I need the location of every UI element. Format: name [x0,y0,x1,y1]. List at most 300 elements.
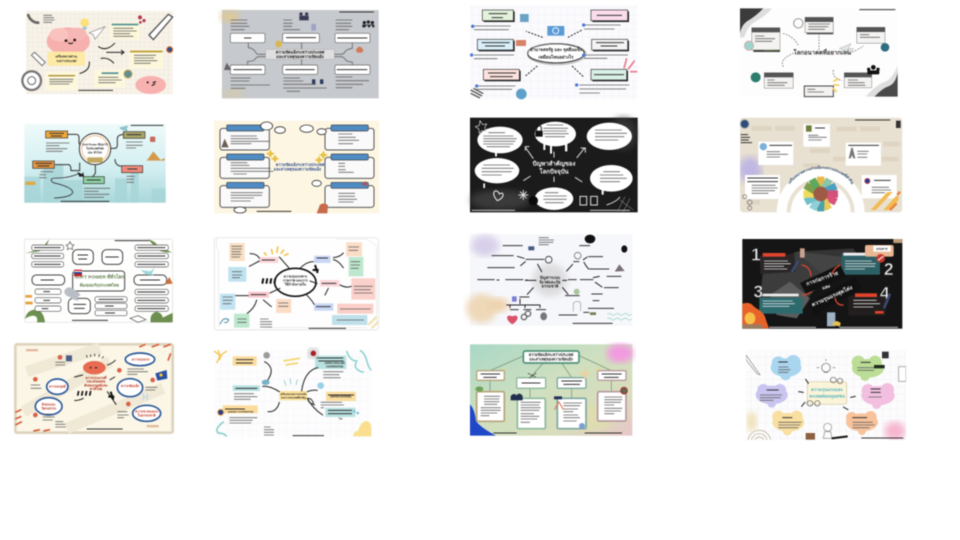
icon: pink wash [884,422,906,440]
icon: group of people [362,20,374,27]
icon: dark figure [554,396,562,399]
box text [231,134,359,202]
icon: paper plane [89,27,105,39]
icon: chalk heart [494,191,503,201]
icon: paper planes [839,44,853,52]
icon: shield [806,125,812,132]
grunge texture [760,248,867,318]
description text [474,25,629,93]
corner stripes [368,317,378,328]
tag labels: JAPAN-THAILAND [324,362,345,365]
content text [481,396,622,422]
icon: tall stripes [503,367,600,372]
tag labels [228,362,351,420]
heading label: ระหว่างประเทศ [56,58,76,63]
diagonal title bands: ความรุนแรงสุดโต่ง [810,283,854,308]
icon: UN flag [547,26,564,36]
tag boxes [477,10,629,81]
icon: splats [585,235,627,253]
icon: globe [516,89,527,99]
icon: chain [521,311,531,320]
numerals: 3 [754,282,764,302]
centre circle title [79,133,111,165]
icon: torn paper [800,248,805,258]
panel text [763,261,880,307]
title: โลกอนาคตที่อยากเห็น [793,48,852,57]
sparkles [266,149,328,164]
connectors [248,43,352,65]
centre circle title: ในประเทศไทย [86,146,104,151]
footer [861,436,903,439]
centre title [807,382,847,404]
icon: gears [275,41,282,47]
centre title [274,161,325,172]
purple wash [739,157,761,183]
icon: film [882,352,889,358]
side text [741,135,752,143]
cloud labels [41,357,159,418]
note box bottom centre [94,70,125,87]
icon: fireworks figures [317,203,328,213]
header note [131,124,163,127]
icon: tank [874,365,885,368]
handwriting [832,436,848,438]
cloud labels: ความมนุษย์ [49,385,66,390]
body text [229,372,344,435]
curved arrows [263,362,323,415]
bullets [470,23,585,88]
icon: red dots [138,15,146,24]
beige corner [893,239,902,243]
clouds [234,122,326,213]
icon: burst lines [264,246,289,256]
central title: และสาเหตุของความขัดแย้ง [276,53,324,60]
dashed path with plane [51,173,79,198]
beige swirls [23,348,163,428]
centre ellipse title: กายภาพ และการ [283,279,308,283]
icon: chalk star [475,121,487,133]
icon: sun burst [624,58,637,72]
icon: bomb people [511,394,523,400]
tag labels: COOPERATION [326,365,344,368]
centre title: สังคมมนุษย์และ [84,382,108,388]
red bullets [33,355,155,417]
side icons [743,195,752,210]
bullet lists [231,20,369,91]
icon: stop sign [865,245,894,263]
blue headers [227,125,368,188]
hierarchy lines [490,356,611,398]
diagonal title bands: การก่อการร้าย [805,269,839,288]
panel text [755,24,880,92]
icon: building [827,312,841,326]
orange stripes [871,192,899,210]
title [533,160,576,176]
icon: burst [518,190,528,200]
icon: signpost [25,182,35,185]
tag labels: โลก [338,416,343,420]
icon: fingerprint [540,312,547,320]
icon: cup [262,380,270,385]
icon: device [528,246,534,250]
footer [493,431,622,434]
cloud text [482,125,627,203]
centre title: เครื่องหมายความร่วมมือ [280,392,307,396]
footer [573,322,613,325]
buildings [24,165,166,203]
icon: light bulb [80,18,89,30]
centre circle title: Soft Power คืออะไร [82,142,108,147]
icon: network [794,19,803,28]
wave pattern [607,313,632,320]
content boxes [477,392,626,429]
icon: pencil [746,355,760,375]
chalk arrows and doodles [523,147,585,182]
numerals: 1 [751,244,761,264]
arch [776,168,865,212]
card 14: yellow highlight mind map [214,348,372,437]
centre title: ความรุนแรงและ [811,387,844,393]
icon: UN [317,382,324,389]
icon: concentric arcs [747,429,772,440]
top-left corner shape [740,8,763,34]
card 5: soft power on sky city [24,124,166,203]
tag labels [248,256,339,311]
card 6: conflict cards on cream [214,121,379,213]
central title: ปัญหาระบบ [540,274,561,281]
arrows [75,360,116,404]
icon: tall H [143,393,147,401]
yellow tags [223,356,356,413]
red stripes [15,344,171,431]
card 8: cooperation on brick wall [740,117,902,213]
icon: atom [545,256,552,263]
footer text [472,209,630,212]
cloud labels: ในธรรมชาติ [138,413,156,418]
icon: red pin [362,181,367,186]
icon: tank [590,312,596,315]
central title: นิเวศและภัย [539,279,561,284]
centre ellipse title: เหมือนไหนอย่างไร [539,54,574,60]
red labels [763,253,884,314]
centre title: ละเลยต่อมนุษยชน [809,393,846,399]
icon: plant [823,423,832,438]
icon: stop sign: STOP IT [876,247,888,251]
arrows [799,379,855,410]
centre title: ความขัดแย้งระหว่างประเทศ [276,161,325,167]
reference text [260,319,272,327]
icon: snake [220,319,229,324]
tag labels [35,133,141,180]
icon: rosette badge [22,71,41,90]
tag labels [482,14,624,77]
arrows [236,253,351,313]
node labels [233,38,367,70]
icon: padlock [535,126,543,137]
red arrows [802,265,844,305]
diagonal title bands: และ [821,283,831,291]
icon: meeting people [312,79,323,84]
centre ellipse title: ใช้กำลังภายใน [285,282,307,287]
cloud labels: สังคมและ [42,402,56,407]
speech bubbles [807,377,843,406]
header note [339,10,374,13]
icon: yellow splat [353,421,371,436]
icon: ASEAN seal [218,409,224,415]
icon: book badge [66,355,72,361]
photo panels [759,253,886,316]
cloud labels: ความขาดแคลน [135,410,159,414]
icon: earth [751,72,761,82]
icon: dots [353,410,359,414]
brick pattern [747,126,900,205]
body text [39,142,143,197]
centre title: ชาติไทย [90,386,102,391]
title: โลกปัจจุบัน [538,168,570,176]
note box top [110,23,140,39]
card 15: green watercolor hierarchy [470,344,633,436]
icon: globe seal [124,70,132,78]
centre photo [813,187,828,201]
panels [752,17,885,97]
cloud text [767,362,881,418]
icon: temple [165,277,173,284]
dashed arrows [782,33,863,81]
note box bottom left [46,72,77,90]
icon: figure [313,265,319,273]
icon: temple [147,151,165,161]
icon: temple [221,139,229,147]
card 3: UN mind map [470,5,638,99]
box text [747,128,891,182]
icon: notebook [899,367,906,381]
centre title: และสาเหตุของความขัดแย้ง [274,165,321,172]
heading label: เครื่องหมายต่างๆ [55,53,78,59]
icon: chalk hands [580,196,620,205]
icon: UN logo circle [744,41,754,50]
icon: plane [77,172,84,177]
card 12: dark collage terrorism [742,239,902,329]
icon: dollar signs [78,391,91,396]
icon: star [66,242,74,250]
footer [769,326,898,329]
icon: flower [579,423,585,429]
footer text [78,89,113,92]
teal tags [233,356,355,417]
tag boxes [33,131,145,184]
title box: และสาเหตุของความขัดแย้ง [529,356,573,362]
icon: light bulb [817,359,835,372]
white splat clouds [475,122,633,210]
node labels [477,246,621,315]
icon: figure [150,137,155,142]
pill labels [34,248,165,313]
cloud labels: ความขัดแย้ง [121,383,140,388]
card 1: brain infographic on cream grid [22,11,173,94]
central title: ความขัดแย้งระหว่างประเทศ [276,49,325,55]
top list [539,238,554,245]
title box: SOFT POWER ที่ทั่วโลก [75,273,124,279]
dashed arrows [525,30,583,77]
pink rays and loops [284,378,297,386]
rounded nodes [32,250,167,314]
tag labels: (UNITED NATIONS) [330,395,351,398]
icon: radar [574,252,581,259]
title box [73,271,125,291]
card 4: world dark panels [740,8,898,97]
icon: seal top left [740,120,749,128]
card 2: grey mind map [220,10,379,98]
icon: pink brain mascot [47,27,90,55]
icon: photo [806,433,815,440]
red cloud mascot [83,361,106,374]
icon: seal [167,47,173,53]
icon: thai flag [74,270,82,276]
category labels [481,374,622,384]
icon: tech globe [881,43,889,52]
centre circle title: และ ทั่วโลก [88,150,102,155]
icon: soldier [108,392,114,400]
icon: plants [574,289,580,295]
centre title: ความรุนแรงที่ [86,375,107,381]
footer [72,319,108,322]
title box: ความขัดแย้งระหว่างประเทศ [529,351,574,357]
icon: people [299,12,309,20]
rays [86,354,104,358]
central title: ธรรมชาติ [542,284,559,289]
icon: flag person [896,121,901,128]
icon: blue corner [470,404,496,436]
icon: explosion [742,303,769,328]
numerals [751,244,893,303]
icon: UN [760,143,767,150]
icon: bird [119,125,129,132]
footer [309,327,346,330]
centre title: ระหว่างประเทศที่สำคัญ [281,395,307,401]
icon: sand speckle [746,412,757,432]
icon: orange legs [555,402,563,410]
icon: temple [224,63,231,70]
card 11: pale network diagram [466,234,632,326]
icon: soldier dot [621,387,627,394]
small text [31,362,157,427]
dollar signs [262,278,275,284]
pastel cloud bubbles [756,355,895,435]
bottom-right corner shape [874,72,898,97]
icon: heart [507,316,518,324]
corner labels [26,349,159,427]
centre title: และส่งผลต่อ [87,380,105,384]
note text [223,246,373,322]
icon: ASEAN seal [865,178,870,184]
centre ellipse title: อำนาจสหรัฐ และ จุดยืนแข็ง [530,45,582,53]
white info boxes [745,124,897,199]
title: ปัญหาสำคัญของ [533,160,576,168]
icon: sparkle [578,366,592,381]
icon: splat [529,196,538,205]
SDG coloured wheel [803,177,838,211]
icon: yellow rays [833,79,839,92]
circuit border lines [217,238,377,328]
footer [87,427,123,430]
centre ellipse title: ความรุนแรงทาง [284,275,307,280]
icon: thai sign [25,295,33,304]
title box [523,351,579,363]
cloud labels: วัฒนธรรม [41,405,56,410]
icon: bird [141,267,155,275]
icon: flag [155,370,167,381]
card 9: soft power Thailand [24,239,173,322]
numerals: 2 [884,259,893,279]
outlined clouds [35,353,161,421]
icon: orange figure [356,47,363,53]
note box right [129,50,163,68]
icon: molecules [528,373,536,378]
icon: book [130,316,146,322]
header note [855,118,890,121]
icon: person [311,24,316,31]
diagonal title bands [800,264,862,315]
icon: green leaves [765,48,780,52]
icon: people group [867,65,880,74]
centre title [84,375,108,391]
card 13: cream with blue outlined clouds [15,344,173,433]
icon: gear [263,352,270,359]
grid doodle [618,197,633,212]
tag labels: (ASEAN COOPERATION) [228,411,254,414]
card 7: blackboard world problems [470,117,638,212]
footer [293,434,324,437]
header note [859,8,895,11]
central title [266,49,334,60]
blue swipes [792,261,890,308]
heading label [48,52,85,66]
central title [539,274,561,289]
icon: number [512,296,517,302]
arch title: เครื่องหมายความร่วมมือระหว่างประเทศที่สำคัญ [788,165,854,185]
icon: soldier [615,264,625,272]
icon: face outline [573,301,581,312]
arrows [497,256,573,294]
watercolor washes [471,235,499,256]
category boxes [477,371,626,388]
icon: hatch [471,88,483,98]
icon: eiffel tower [849,148,855,158]
card 16: pastel clouds on grid [745,350,906,440]
icon: pencil top right [149,14,173,40]
icon: burst [214,350,227,363]
numerals: 4 [880,283,890,303]
footer [61,200,109,203]
title box: ต้องยอมรับประเทศไทย [80,281,120,287]
sticky notes [220,242,375,328]
icon: highlighter [31,52,45,66]
centre ellipse title [527,43,586,65]
centre title [279,391,307,401]
icon: colourful people [516,14,529,46]
centre ellipse title [275,268,316,296]
leaves [25,239,173,322]
footer [257,210,291,213]
icon: second brain [135,76,166,94]
list pills [32,245,168,316]
icon: green bird [475,386,483,392]
cloud labels: ความรุนแรง [132,357,150,362]
white boxes [220,128,374,207]
connector lines [55,134,124,177]
icon: lake / map [64,287,81,301]
arrows [80,43,124,73]
